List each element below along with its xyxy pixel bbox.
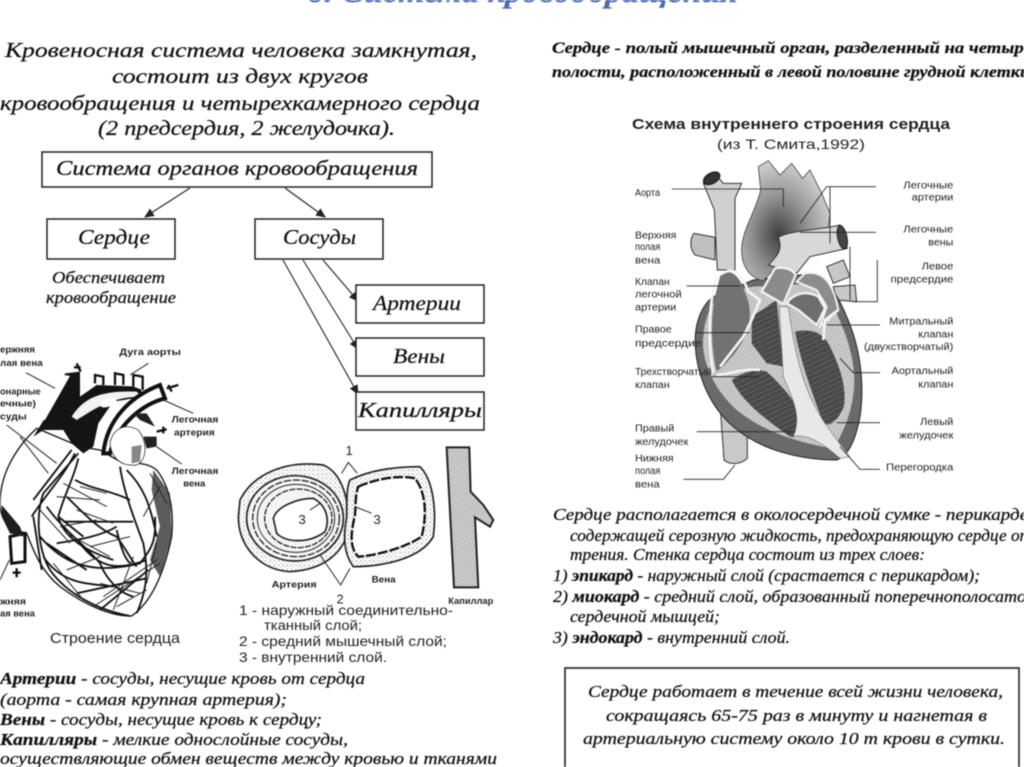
left side mottling (150, 470, 172, 577)
legend: vessel wall layers: 3 - внутренний слой. (239, 649, 387, 665)
capillary (447, 447, 493, 587)
myocardium (703, 283, 854, 448)
labels: heart exterior: ая вена (0, 609, 36, 619)
heart body outer wall (695, 273, 862, 460)
aortic branches (95, 373, 143, 390)
labels: heart exterior: артерия (174, 427, 215, 437)
upper left chamber (797, 273, 838, 327)
box: arteries (356, 285, 484, 323)
box: capillaries: Капилляры (357, 398, 482, 422)
text block: vessel definitions: Артерии - сосуды, несущие кровь от сердца (0, 669, 365, 688)
labels: heart interior right: Легочные (903, 225, 954, 236)
text block: pericardium and heart wall layers: 2) миокард - средний слой, образованный поперечнополосатой (553, 587, 1024, 606)
diagram: organs of circulation flowchart (42, 152, 484, 430)
labels: heart interior left: Нижняя (635, 454, 674, 465)
labels: heart interior left: Аорта (635, 188, 660, 199)
heart silhouette (0, 428, 172, 616)
illustration: heart exterior with coronary vessels (0, 345, 218, 619)
labels: heart interior right: артерии (912, 193, 953, 204)
labels: heart exterior: ечные) (0, 399, 36, 409)
artery lumen (273, 498, 327, 541)
valve tube (762, 268, 796, 304)
numbers and names: Артерия (272, 579, 317, 589)
arrow: to capillaries (283, 260, 358, 394)
left ventricle (795, 330, 845, 424)
labels: heart interior left: клапан (635, 380, 670, 391)
illustration: artery, vein and capillary cross sections (238, 444, 494, 606)
aortic arch (742, 161, 830, 281)
box: vessels (255, 219, 383, 259)
labels: heart exterior: Легочная (172, 466, 218, 476)
artery muscular layers (247, 476, 343, 561)
caption: heart structure: Строение сердца (50, 631, 181, 647)
labels: heart interior right: Аортальный (892, 366, 953, 377)
text block: pericardium and heart wall layers: Сердце располагается в околосердечной сумке - перикарде, (553, 505, 1024, 524)
numbers and names (272, 444, 494, 606)
labels: heart interior right: Митральный (889, 316, 953, 327)
legend: vessel wall layers: тканный слой; (264, 617, 362, 633)
secondary vessel branches (40, 473, 167, 610)
inferior vena cava (10, 533, 25, 563)
box: organ system (42, 152, 432, 187)
labels: heart exterior: жняя (0, 596, 26, 606)
labels: heart interior right (864, 181, 954, 474)
labels: heart exterior: ержняя (0, 345, 35, 355)
arrow: to vessels (285, 188, 325, 217)
box: heart (47, 219, 175, 259)
coronary vessels network (32, 450, 157, 616)
text block: pericardium and heart wall layers: трения. Стенка сердца состоит из трех слоев: (570, 545, 925, 564)
text block: vessel definitions: (аорта - самая крупная артерия); (0, 690, 287, 709)
box: vessels: Сосуды (283, 225, 356, 249)
arrow: to veins (303, 260, 358, 349)
callout: heart work: Сердце работает в течение всей жизни человека, (588, 682, 1003, 701)
labels: heart interior right: Перегородка (886, 463, 954, 474)
numbers and names: 2 (337, 592, 344, 606)
pulmonary vein stubs (827, 260, 857, 302)
labels: heart interior left: полая (635, 466, 660, 477)
text block: vessel definitions (0, 669, 497, 767)
superior vena cava (703, 174, 742, 270)
text block: pericardium and heart wall layers: 1) эпикард - наружный слой (срастается с перикардом); (553, 566, 980, 585)
box: veins (356, 338, 484, 376)
box: organ system: Система органов кровообращения (56, 156, 418, 180)
leader lines (0, 363, 193, 580)
pulmonary vessel mouth (835, 225, 849, 250)
arrow: to arteries (323, 260, 358, 301)
note: heart provides circulation: Обеспечивает (52, 268, 165, 287)
black great vessels (33, 372, 143, 453)
right atrium (712, 272, 750, 372)
callout: heart work: артериальную систему около 10 т крови в сутки. (583, 729, 1005, 748)
text block: heart definition (552, 40, 1024, 81)
labels: heart interior right: (двухстворчатый) (864, 342, 953, 353)
labels: heart exterior: лая вена (0, 358, 44, 368)
pointer lines (310, 462, 372, 585)
text block: circulatory system intro: кровообращения и четырехкамерного сердца (0, 91, 480, 115)
side branch of vena cava (691, 233, 715, 260)
box: heart: Сердце (78, 225, 150, 249)
labels: heart interior right: клапан (918, 379, 953, 390)
labels: heart interior left: Верхняя (635, 230, 676, 241)
text block: vessel definitions: Капилляры - мелкие однослойные сосуды, (0, 730, 348, 749)
labels: heart interior right: Левый (920, 417, 953, 428)
callout: heart work (565, 668, 1019, 767)
text block: heart definition: полости, расположенный в левой половине грудной клетки (552, 64, 1024, 81)
left atrium (787, 293, 825, 325)
legend: vessel wall layers: 2 - средний мышечный слой; (239, 633, 447, 649)
labels: heart interior left: артерии (635, 303, 676, 314)
note: heart provides circulation: кровообращение (46, 288, 176, 307)
labels: heart exterior (0, 345, 218, 619)
right ventricle upper muscle (752, 300, 783, 367)
heading: heart structure scheme: Схема внутреннего строения сердца (632, 116, 951, 133)
labels: heart interior right: клапан (918, 329, 953, 340)
aortic arch pale (72, 391, 142, 420)
legend: vessel wall layers: 1 - наружный соединительно- (239, 602, 453, 618)
numbers and names: Вена (372, 575, 397, 585)
labels: heart interior left: предсердие (635, 339, 702, 350)
labels: heart exterior: вена (183, 479, 206, 489)
text block: pericardium and heart wall layers: сердечной мышцей; (570, 607, 720, 626)
left auricle (110, 427, 145, 465)
vein wall (345, 467, 435, 567)
pulmonary artery (103, 385, 165, 453)
labels: heart interior left (635, 188, 712, 490)
labels: heart interior left: Клапан (635, 277, 670, 288)
numbers and names: 3 (298, 512, 306, 527)
note: heart provides circulation (46, 268, 176, 307)
vein lumen (352, 477, 425, 557)
arch window (99, 396, 118, 409)
labels: heart interior left: Правое (635, 325, 672, 336)
labels: heart interior right: вены (928, 238, 953, 249)
heading: heart structure scheme (632, 116, 951, 152)
labels: heart exterior: Легочная (172, 415, 218, 425)
pulmonary trunk tube (768, 225, 847, 273)
callout: heart work: сокращаясь 65-75 раз в минуту и нагнетая в (606, 706, 988, 725)
numbers and names: 1 (346, 444, 353, 458)
labels: heart interior left: Трехстворчатый (635, 367, 712, 378)
box: veins: Вены (393, 344, 445, 368)
numbers and names: Капиллар (448, 596, 494, 606)
right atrium mottling (2, 505, 23, 537)
labels: heart interior left: вена (635, 479, 660, 490)
labels: heart interior left: легочной (635, 289, 682, 300)
labels: heart interior right: желудочек (899, 430, 954, 441)
text block: pericardium and heart wall layers: содержащей серозную жидкость, предохраняющую сердце от (570, 526, 1024, 545)
valve strands (710, 271, 838, 375)
text block: circulatory system intro: Кровеносная система человека замкнутая, (4, 38, 477, 62)
pulmonary veins dark (133, 413, 157, 448)
text block: circulatory system intro: состоит из двух кругов (112, 64, 368, 88)
text block: pericardium and heart wall layers: 3) эндокард - внутренний слой. (552, 628, 790, 647)
heading: heart structure scheme: (из Т. Смита,1992) (717, 136, 865, 152)
arrow markers (13, 363, 178, 577)
auricle shading (132, 445, 142, 463)
pale vena cava band (40, 375, 70, 420)
text block: circulatory system intro (0, 38, 480, 140)
labels: heart exterior: онарные (0, 386, 41, 396)
text block: heart definition: Сердце - полый мышечный орган, разделенный на четыре (552, 40, 1024, 57)
labels: heart interior left: Правый (635, 424, 674, 435)
illustration: heart interior (635, 161, 954, 490)
text block: circulatory system intro: (2 предсердия, 2 желудочка). (98, 116, 395, 140)
box: arteries: Артерии (371, 291, 461, 315)
leader lines (672, 187, 880, 479)
septum (779, 307, 850, 458)
numbers and names: 3 (373, 512, 381, 527)
legend: vessel wall layers (239, 602, 453, 665)
arrow: to heart (145, 188, 190, 217)
labels: heart interior left: желудочек (635, 437, 689, 448)
right ventricle (732, 370, 805, 437)
labels: heart interior right: Легочные (903, 181, 954, 192)
labels: heart exterior: Дуга аорты (119, 347, 181, 357)
inferior vena cava (720, 403, 747, 464)
labels: heart interior left: вена (635, 255, 661, 266)
aortic opening (702, 170, 722, 187)
box: capillaries (356, 392, 484, 430)
text block: pericardium and heart wall layers (552, 505, 1024, 647)
labels: heart interior left: полая (635, 242, 660, 253)
labels: heart exterior: суды (0, 411, 27, 421)
text block: vessel definitions: Вены - сосуды, несущие кровь к сердцу; (0, 710, 322, 729)
labels: heart interior right: предсердие (891, 275, 954, 286)
artery outer wall (238, 464, 349, 572)
labels: heart interior right: Левое (922, 261, 954, 272)
